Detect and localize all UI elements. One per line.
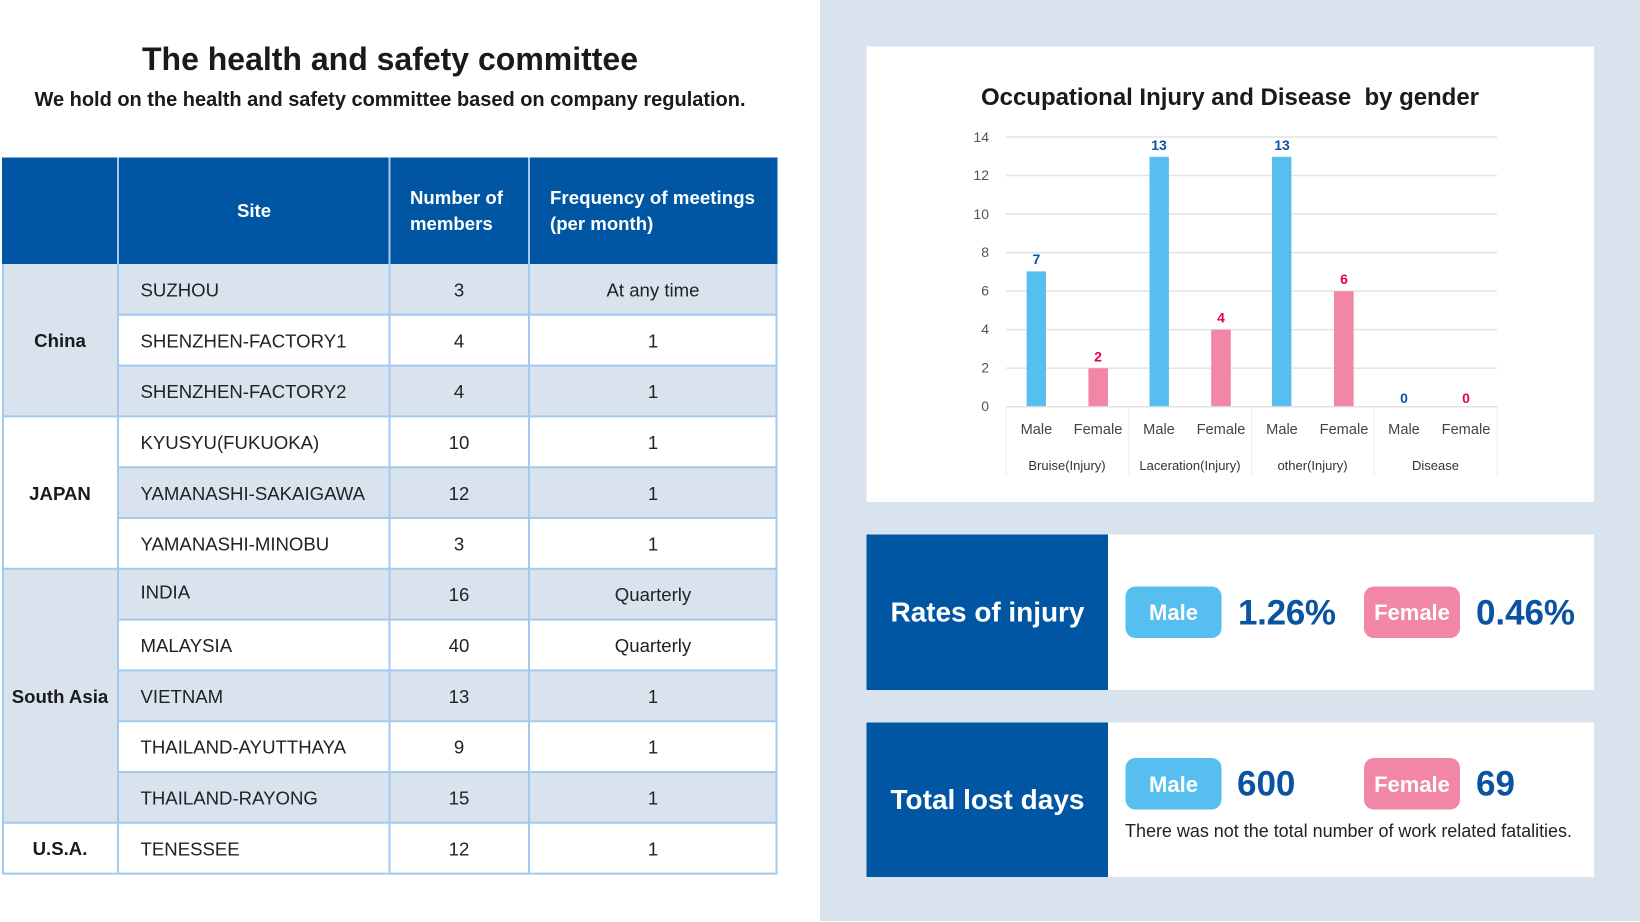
- member counts: 16: [449, 584, 469, 605]
- region labels: [12, 330, 109, 859]
- table header: members: [410, 213, 493, 234]
- female badge: [1364, 758, 1460, 810]
- site names: VIETNAM: [140, 686, 223, 707]
- member counts: [449, 280, 469, 860]
- meeting frequency: Quarterly: [615, 635, 692, 656]
- male bars: [1027, 157, 1291, 406]
- bar chart: [973, 129, 1497, 476]
- category labels: Male: [1388, 422, 1420, 438]
- title: The health and safety committee: [142, 41, 638, 77]
- table grid: [3, 264, 776, 874]
- category labels: Male: [1143, 422, 1175, 438]
- meeting frequency: 1: [648, 432, 658, 453]
- panel: total lost days: [866, 722, 1594, 877]
- site names: INDIA: [140, 582, 191, 602]
- subtitle: We hold on the health and safety committee based on company regulation.: [34, 89, 746, 111]
- value labels: 13: [1151, 137, 1167, 153]
- region labels: U.S.A.: [33, 838, 87, 859]
- member counts: 4: [454, 330, 464, 352]
- meeting frequency: At any time: [606, 280, 700, 300]
- y axis labels: 0: [981, 398, 989, 414]
- table header: [2, 158, 778, 264]
- site names: YAMANASHI-MINOBU: [140, 534, 329, 554]
- table header: Frequency of meetings: [550, 187, 755, 208]
- fatalities note: There was not the total number of work related fatalities.: [1125, 821, 1572, 841]
- meeting frequency: [606, 280, 700, 860]
- y axis labels: [973, 129, 989, 414]
- value labels: 4: [1217, 310, 1225, 326]
- member counts: 9: [454, 736, 464, 758]
- value labels: 13: [1274, 137, 1290, 153]
- category labels: Female: [1320, 422, 1368, 438]
- group labels: Laceration(Injury): [1139, 458, 1241, 473]
- site names: THAILAND-AYUTTHAYA: [140, 736, 347, 758]
- table header: Number of: [410, 187, 504, 208]
- panel: occupational injury chart: [866, 46, 1594, 502]
- y axis labels: 4: [981, 321, 989, 337]
- group labels: Disease: [1412, 458, 1459, 473]
- value labels: 2: [1094, 348, 1102, 364]
- group labels: other(Injury): [1277, 458, 1348, 473]
- table: committee sites: [2, 158, 778, 874]
- y axis labels: 6: [981, 282, 989, 298]
- member counts: 12: [449, 483, 469, 504]
- heading: Total lost days: [890, 784, 1084, 815]
- y axis labels: 10: [973, 206, 989, 222]
- male badge: Male: [1149, 600, 1198, 625]
- y axis labels: 14: [973, 129, 989, 145]
- site names: TENESSEE: [140, 838, 240, 860]
- female bars: [1088, 291, 1354, 406]
- male badge: [1126, 586, 1222, 638]
- female badge: [1364, 586, 1460, 638]
- value labels: [1033, 137, 1470, 406]
- panel: right background: [820, 0, 1640, 921]
- region labels: JAPAN: [29, 483, 91, 504]
- site names: SHENZHEN-FACTORY1: [140, 330, 346, 352]
- site names: SHENZHEN-FACTORY2: [140, 381, 346, 402]
- female rate: 0.46%: [1476, 594, 1575, 632]
- meeting frequency: 1: [648, 483, 658, 504]
- male rate: 1.26%: [1238, 594, 1336, 632]
- site names: YAMANASHI-SAKAIGAWA: [140, 483, 366, 504]
- region labels: South Asia: [12, 686, 109, 707]
- y axis labels: 12: [973, 167, 989, 183]
- member counts: 13: [449, 686, 469, 707]
- meeting frequency: 1: [648, 330, 658, 352]
- region labels: China: [34, 330, 86, 351]
- table header: Site: [237, 200, 271, 221]
- value labels: 6: [1340, 271, 1348, 287]
- male badge: Male: [1149, 772, 1198, 797]
- heading: Rates of injury: [890, 596, 1085, 628]
- member counts: 4: [454, 381, 464, 402]
- member counts: 12: [449, 838, 469, 860]
- site names: [140, 280, 366, 860]
- y axis labels: 2: [981, 360, 989, 376]
- female badge: Female: [1374, 600, 1450, 625]
- meeting frequency: 1: [648, 686, 658, 707]
- chart title: Occupational Injury and Disease by gender: [981, 84, 1479, 111]
- site names: THAILAND-RAYONG: [140, 788, 318, 808]
- meeting frequency: 1: [648, 736, 658, 758]
- panel: health and safety committee: [2, 41, 778, 874]
- gridlines: [1006, 137, 1497, 476]
- group labels: [1028, 458, 1459, 473]
- member counts: 3: [454, 534, 464, 554]
- male badge: [1126, 758, 1222, 810]
- y axis labels: 8: [981, 244, 989, 260]
- member counts: 40: [449, 635, 469, 656]
- meeting frequency: 1: [648, 788, 658, 808]
- category labels: Male: [1266, 422, 1298, 438]
- site names: KYUSYU(FUKUOKA): [140, 432, 319, 453]
- female badge: Female: [1374, 772, 1450, 797]
- group labels: Bruise(Injury): [1028, 458, 1106, 473]
- member counts: 10: [449, 432, 469, 453]
- table shading: [3, 264, 776, 823]
- member counts: 15: [449, 788, 469, 808]
- category labels: Female: [1074, 422, 1122, 438]
- value labels: 7: [1033, 251, 1041, 267]
- site names: MALAYSIA: [140, 635, 233, 656]
- meeting frequency: 1: [648, 381, 658, 402]
- category labels: Female: [1442, 422, 1490, 438]
- member counts: 3: [454, 280, 464, 300]
- value labels: 0: [1462, 390, 1470, 406]
- female lost days: 69: [1476, 764, 1515, 804]
- table header: (per month): [550, 213, 653, 234]
- meeting frequency: 1: [648, 838, 658, 860]
- meeting frequency: 1: [648, 534, 658, 554]
- meeting frequency: Quarterly: [615, 584, 692, 605]
- category labels: Female: [1197, 422, 1245, 438]
- category labels: [1021, 422, 1490, 438]
- value labels: 0: [1400, 390, 1408, 406]
- category labels: Male: [1021, 422, 1052, 438]
- male lost days: 600: [1237, 764, 1295, 804]
- panel: rates of injury: [866, 534, 1594, 690]
- site names: SUZHOU: [140, 280, 219, 300]
